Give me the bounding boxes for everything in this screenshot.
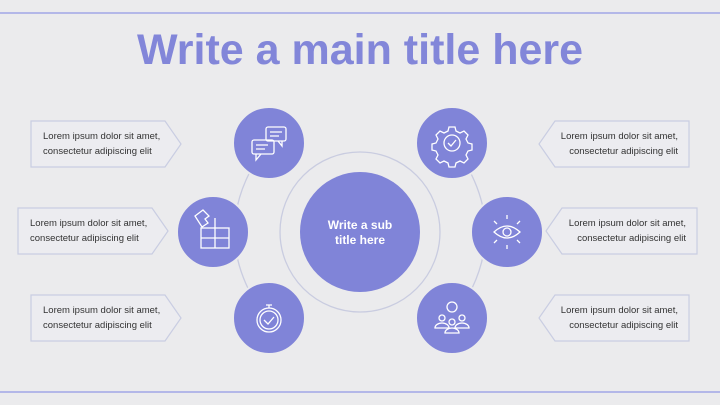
bottom rule: [0, 391, 720, 393]
callout text right 2: [569, 218, 686, 244]
center ring: [280, 152, 440, 312]
icon: puzzle: [195, 210, 229, 248]
center circle: title here: [335, 233, 385, 247]
callout text right 3: Lorem ipsum dolor sit amet,: [561, 305, 678, 316]
callout text right 1: Lorem ipsum dolor sit amet,: [561, 131, 678, 142]
callout boxes: [18, 121, 697, 341]
callout text left 1: consectetur adipiscing elit: [43, 146, 152, 157]
icon: chat: [252, 127, 286, 160]
callout text left 2: [30, 218, 147, 244]
top rule: [0, 12, 720, 14]
callout text right 2: consectetur adipiscing elit: [577, 233, 686, 244]
icon circles: [177, 107, 543, 354]
center circle: [300, 172, 420, 292]
callout text left 2: consectetur adipiscing elit: [30, 233, 139, 244]
callout text right 1: consectetur adipiscing elit: [569, 146, 678, 157]
callout text right 2: Lorem ipsum dolor sit amet,: [569, 218, 686, 229]
connector arcs: [234, 142, 486, 322]
callout text right 1: [561, 131, 678, 157]
callout text left 3: Lorem ipsum dolor sit amet,: [43, 305, 160, 316]
callout text left 2: Lorem ipsum dolor sit amet,: [30, 218, 147, 229]
callout text left 1: [43, 131, 160, 157]
callout text left 3: [43, 305, 160, 331]
callout text left 3: consectetur adipiscing elit: [43, 320, 152, 331]
callout text left 1: Lorem ipsum dolor sit amet,: [43, 131, 160, 142]
callout text right 3: [561, 305, 678, 331]
callout text right 3: consectetur adipiscing elit: [569, 320, 678, 331]
icon: team idea: [435, 302, 469, 333]
icon: stopwatch: [257, 305, 281, 332]
icon: gear: [432, 127, 472, 167]
center circle: Write a sub: [328, 218, 392, 232]
title: Write a main title here: [137, 26, 583, 74]
icon: eye: [494, 215, 520, 249]
